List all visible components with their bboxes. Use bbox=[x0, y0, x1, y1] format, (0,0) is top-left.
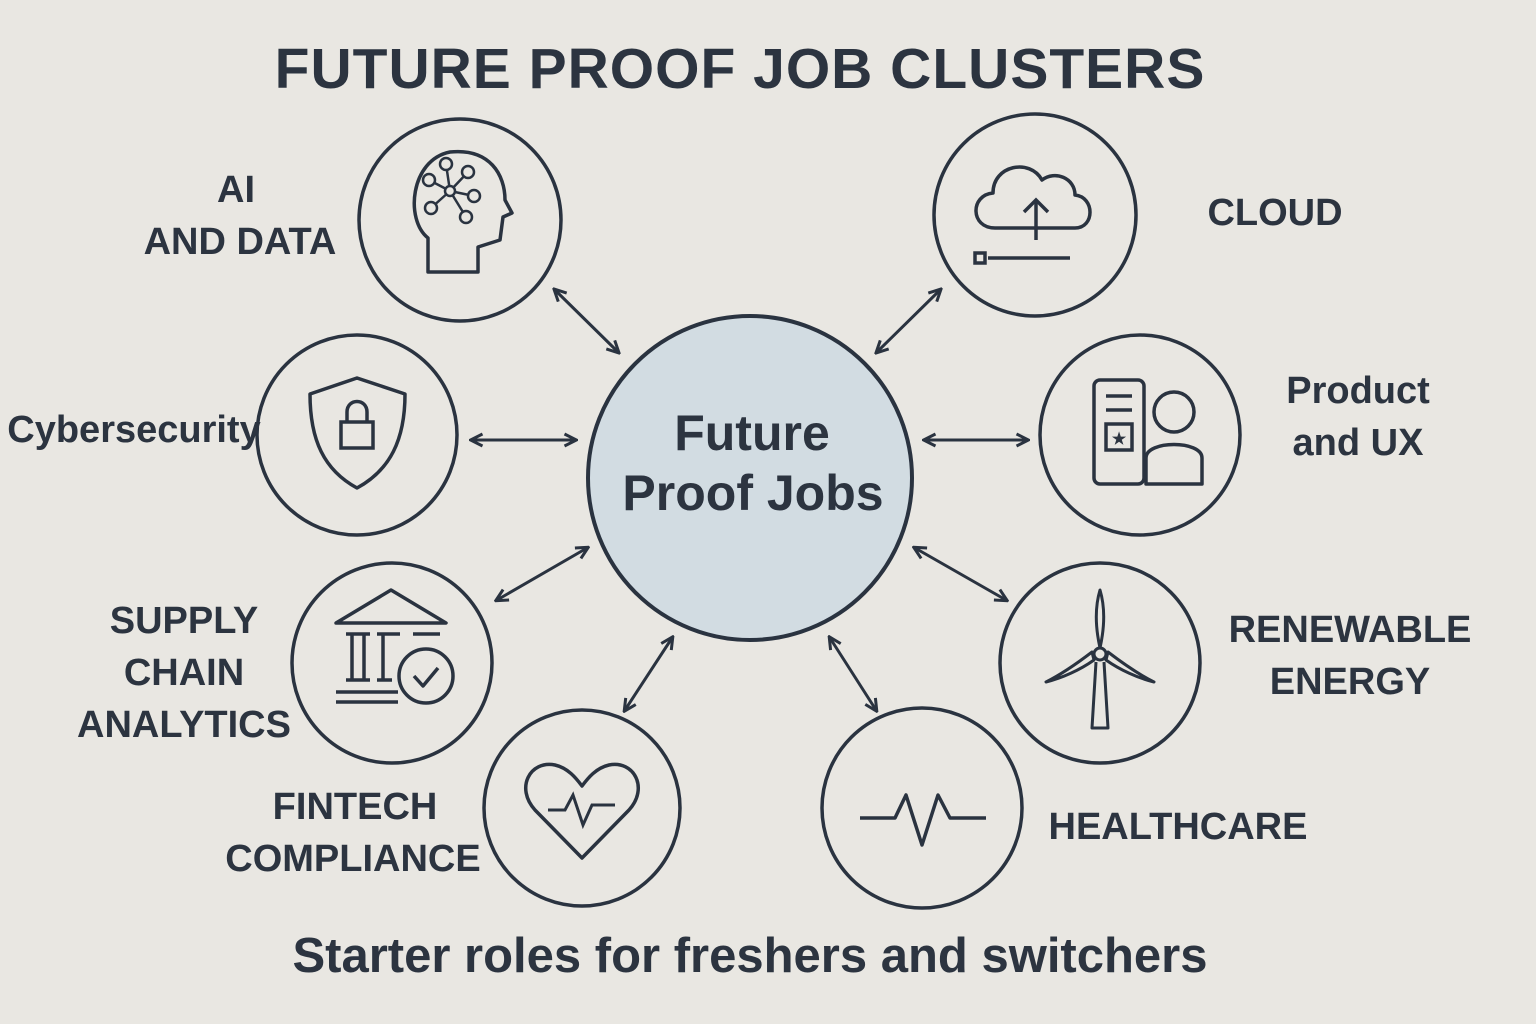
cluster: product and UX: and UX bbox=[1293, 422, 1424, 464]
title: FUTURE PROOF JOB CLUSTERS bbox=[275, 37, 1205, 101]
cluster: supply chain analytics: ANALYTICS bbox=[77, 704, 291, 746]
subtitle: Starter roles for freshers and switchers bbox=[292, 929, 1208, 983]
cluster: product and UX bbox=[1040, 335, 1430, 535]
cluster: cloud bbox=[934, 114, 1343, 316]
cluster: fintech compliance bbox=[225, 710, 680, 906]
cluster: AI and data bbox=[144, 119, 561, 321]
cluster: product and UX: Product bbox=[1286, 370, 1430, 412]
cluster: healthcare: HEALTHCARE bbox=[1049, 806, 1307, 848]
cluster: supply chain analytics: SUPPLY bbox=[110, 600, 258, 642]
cluster: fintech compliance: COMPLIANCE bbox=[225, 838, 481, 880]
cluster: renewable energy: RENEWABLE bbox=[1229, 609, 1471, 651]
cluster: AI and data: AND DATA bbox=[144, 221, 336, 263]
cluster: cybersecurity: Cybersecurity bbox=[7, 409, 261, 451]
cluster: product and UX: ★ bbox=[1112, 431, 1127, 448]
cluster: cybersecurity bbox=[7, 335, 457, 535]
cluster: AI and data: AI bbox=[217, 169, 255, 211]
cluster: supply chain analytics: CHAIN bbox=[124, 652, 244, 694]
cluster: renewable energy bbox=[1000, 563, 1471, 763]
cluster: cloud: CLOUD bbox=[1207, 192, 1343, 234]
center hub: Future bbox=[674, 405, 830, 461]
cluster: renewable energy: ENERGY bbox=[1270, 661, 1430, 703]
arrows bbox=[472, 290, 1027, 710]
cluster: healthcare bbox=[822, 708, 1307, 908]
cluster: supply chain analytics bbox=[77, 563, 492, 763]
cluster: fintech compliance: FINTECH bbox=[273, 786, 437, 828]
center hub bbox=[588, 316, 912, 640]
center hub: Proof Jobs bbox=[622, 465, 884, 521]
